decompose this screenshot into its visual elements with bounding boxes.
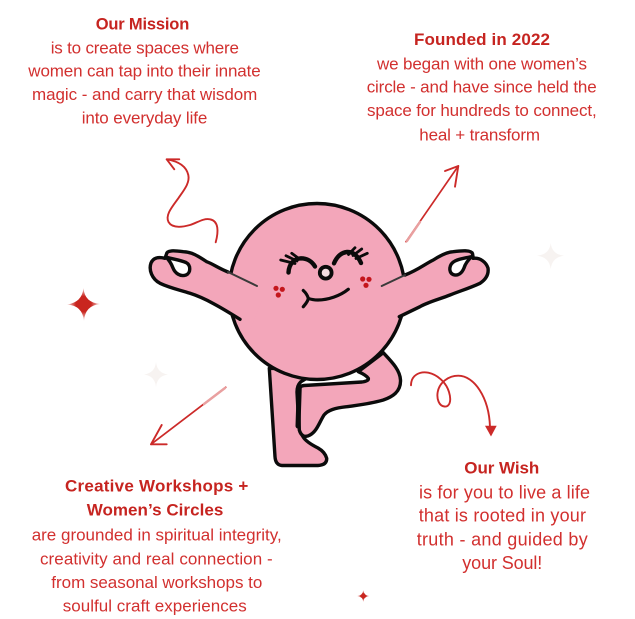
- text block: Our Wish: Our Wish: [464, 458, 539, 477]
- text block: Founded in 2022: circle - and have since held the: [367, 78, 597, 97]
- text block: Creative Workshops + Women's Circles: Women’s Circles: [87, 500, 223, 519]
- text block: Our Wish: [417, 458, 590, 573]
- text block: Creative Workshops + Women's Circles: creativity and real connection -: [40, 549, 273, 568]
- left freckles: [273, 286, 285, 298]
- star: pale right: [537, 243, 564, 269]
- character: pink yoga figure: [150, 204, 488, 466]
- text block: Creative Workshops + Women's Circles: Creative Workshops +: [65, 477, 248, 496]
- text block: Founded in 2022: we began with one women’s: [376, 54, 587, 73]
- text block: Founded in 2022: Founded in 2022: [414, 30, 550, 49]
- text block: Our Mission: into everyday life: [82, 108, 207, 127]
- text block: Our Mission: Our Mission: [96, 15, 189, 33]
- text block: Our Wish: your Soul!: [462, 553, 542, 573]
- face: [273, 248, 372, 307]
- arrow: to Creative Workshops: [151, 387, 226, 444]
- inner leg thick line: [298, 387, 299, 426]
- arrow: looped to Our Wish: [411, 372, 497, 436]
- arrow: squiggle to Our Mission: [167, 159, 218, 242]
- left arm shoulder line: [228, 272, 257, 286]
- standing leg: [269, 368, 327, 466]
- text block: Creative Workshops + Women's Circles: soulful craft experiences: [63, 597, 247, 616]
- text block: Creative Workshops + Women's Circles: are grounded in spiritual integrity,: [32, 526, 282, 545]
- text block: Our Mission: [27, 15, 261, 127]
- left arm: [150, 251, 262, 330]
- nose: [320, 267, 332, 279]
- text block: Founded in 2022: heal + transform: [419, 126, 540, 145]
- smile: [303, 289, 348, 307]
- right arm: [370, 251, 488, 330]
- right hand finger hole: [450, 256, 472, 275]
- star: red large: [67, 288, 100, 321]
- bent leg: [298, 353, 401, 436]
- arrow: to Founded in 2022: [406, 166, 458, 242]
- left eye with lashes: [281, 253, 315, 272]
- star: small red: [357, 590, 370, 602]
- text block: Founded in 2022: [367, 30, 597, 145]
- text block: Our Wish: truth - and guided by: [417, 529, 588, 549]
- text block: Our Mission: women can tap into their innate: [27, 62, 261, 81]
- text block: Creative Workshops + Women's Circles: from seasonal workshops to: [51, 573, 262, 592]
- star: pale left: [144, 362, 168, 387]
- right arm shoulder line: [382, 275, 405, 286]
- right freckles: [360, 276, 372, 288]
- text block: Our Mission: magic - and carry that wisdom: [32, 85, 257, 104]
- text block: Founded in 2022: space for hundreds to connect,: [367, 101, 597, 120]
- right eye with lashes: [334, 248, 367, 263]
- text block: Our Wish: that is rooted in your: [419, 506, 586, 526]
- left hand finger hole: [166, 257, 190, 276]
- text block: Our Mission: is to create spaces where: [51, 38, 239, 57]
- text block: Creative Workshops + Women's Circles: [32, 477, 282, 616]
- text block: Our Wish: is for you to live a life: [419, 482, 590, 502]
- body circle: [229, 204, 405, 380]
